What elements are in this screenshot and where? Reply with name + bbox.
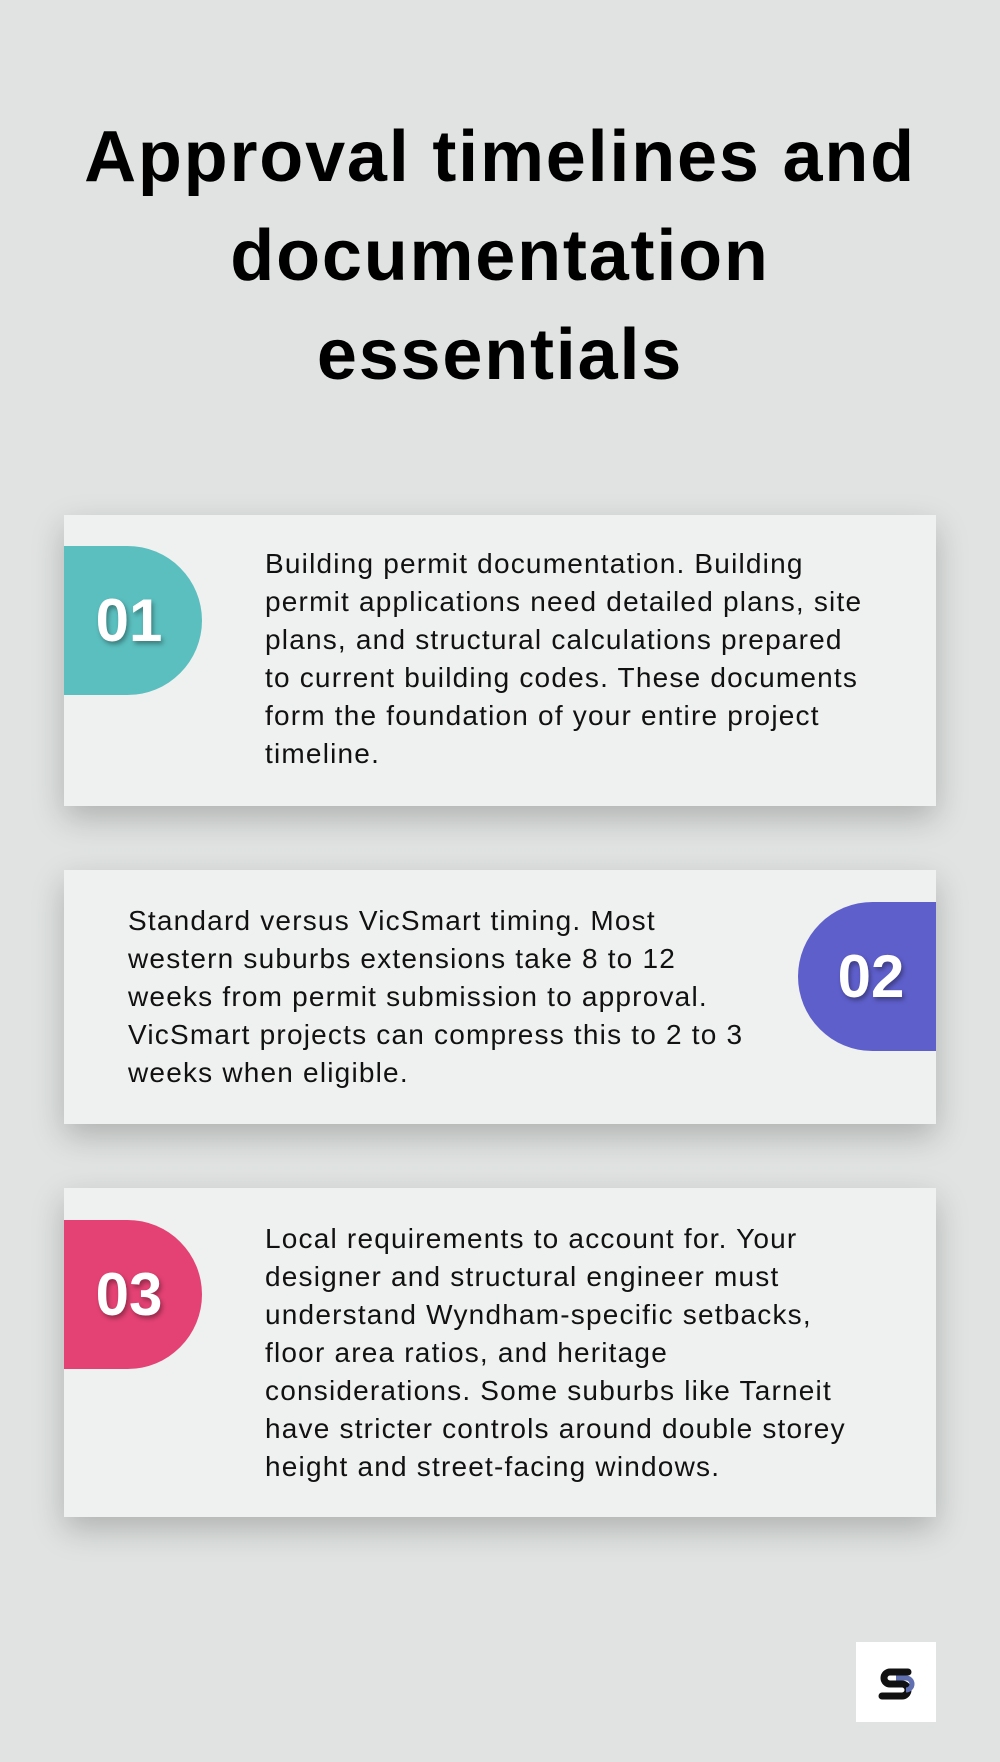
logo [856, 1642, 936, 1722]
text: card 01: plans, and structural calculations prepared [265, 624, 843, 655]
title: documentation [230, 216, 770, 296]
text: card 01: Building permit documentation. Building [265, 548, 804, 579]
badge 01 [64, 546, 202, 695]
badge 03: 03 [96, 1261, 162, 1328]
panel: card 03 [64, 1188, 936, 1517]
text: card 03: height and street-facing windows. [265, 1451, 720, 1482]
badge 01: 01 [96, 587, 162, 654]
badge 03 [64, 1220, 202, 1369]
text: card 02: weeks from permit submission to approval. [128, 981, 708, 1012]
panel: card 01 [64, 515, 936, 806]
panel: card 02 [64, 870, 936, 1124]
badge 02: 02 [838, 943, 904, 1010]
text: card 02 [128, 905, 743, 1088]
text: card 03: Local requirements to account for. Your [265, 1223, 797, 1254]
title: essentials [317, 315, 683, 395]
text: card 02: Standard versus VicSmart timing. Most [128, 905, 656, 936]
text: card 03: floor area ratios, and heritage [265, 1337, 668, 1368]
text: card 02: weeks when eligible. [128, 1057, 409, 1088]
text: card 03: have stricter controls around double storey [265, 1413, 846, 1444]
text: card 03: understand Wyndham-specific setbacks, [265, 1299, 812, 1330]
text: card 03: designer and structural engineer must [265, 1261, 779, 1292]
text: card 03 [265, 1223, 846, 1482]
badge 02 [798, 902, 936, 1051]
text: card 02: VicSmart projects can compress this to 2 to 3 [128, 1019, 743, 1050]
text: card 01: form the foundation of your entire project [265, 700, 820, 731]
title [84, 117, 916, 395]
text: card 01 [265, 548, 862, 769]
text: card 02: western suburbs extensions take 8 to 12 [128, 943, 676, 974]
title: Approval timelines and [84, 117, 916, 197]
text: card 01: to current building codes. These documents [265, 662, 858, 693]
text: card 01: timeline. [265, 738, 380, 769]
text: card 03: considerations. Some suburbs like Tarneit [265, 1375, 832, 1406]
text: card 01: permit applications need detailed plans, site [265, 586, 862, 617]
